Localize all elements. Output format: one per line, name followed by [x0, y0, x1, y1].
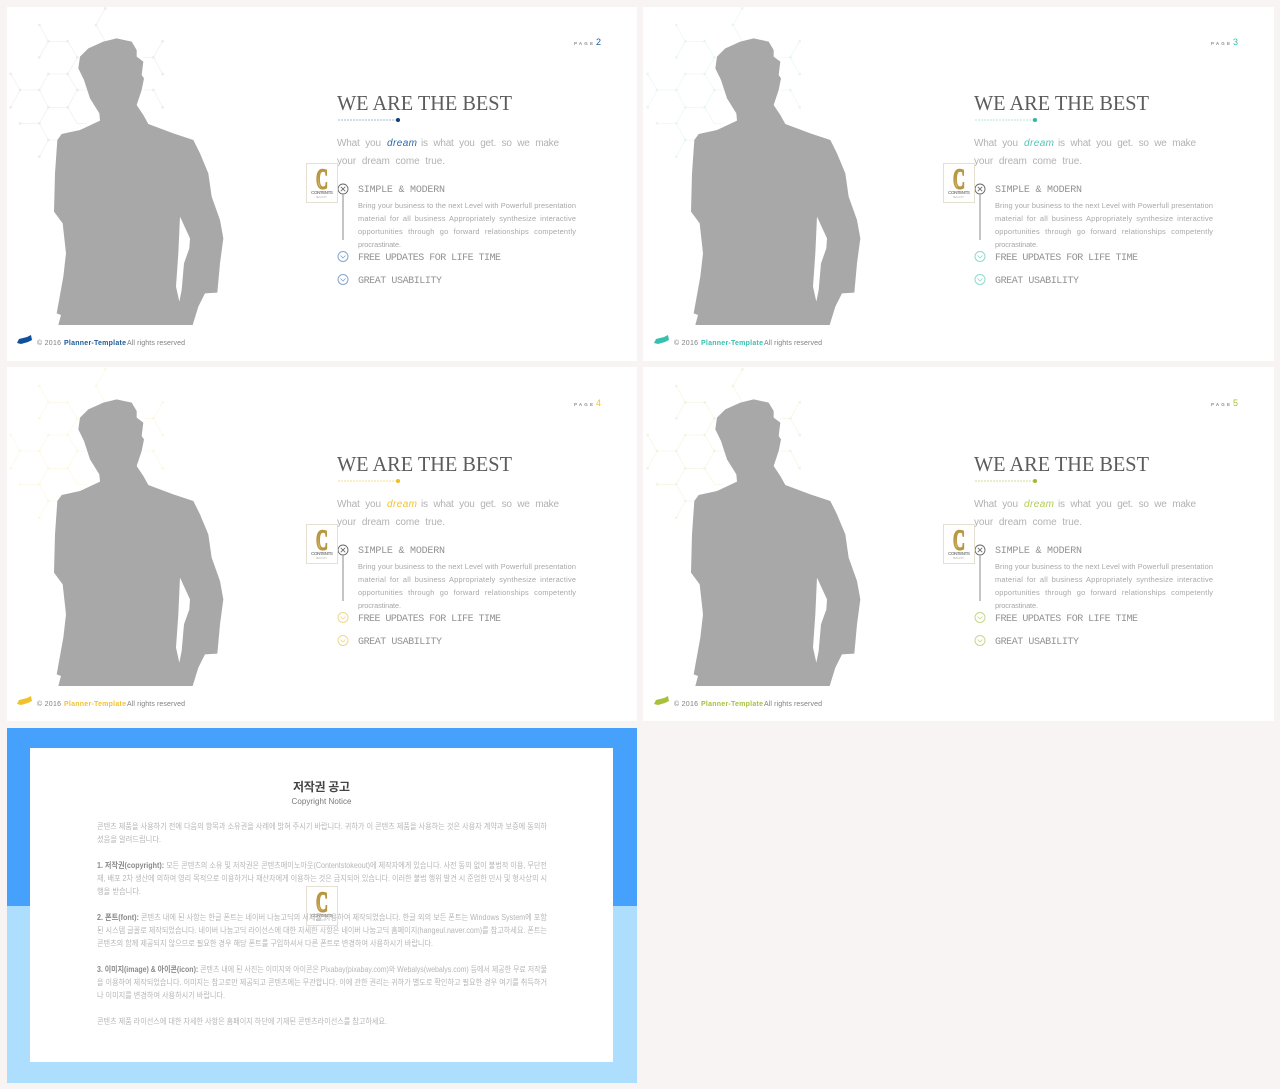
section 1: copyright: 1. 저작권(copyright): 모든 콘텐츠의 소유 및 저작권은 콘텐츠메이노아웃(Contentstokeout)에 제작자에게 있습니다. 사전 동의 없이 불법적 이용, 무단전 — [97, 860, 547, 870]
footer text: Planner-Template — [701, 701, 763, 708]
subtitle: is what you get. so we make — [421, 499, 559, 510]
heading underline — [975, 118, 1037, 122]
page number: PAGE — [574, 402, 593, 407]
notice title: 저작권 공고 — [293, 779, 350, 794]
page number: PAGE — [1211, 402, 1230, 407]
section 2: font: 콘텐츠의 함께 제공되지 않으므로 필요한 경우 해당 폰트를 구입하셔서 다른 폰트로 변경하여 사용하시기 바랍니다. — [97, 938, 433, 948]
heading underline — [975, 479, 1037, 483]
feature: simple and modern: material for all business Appropriately synthesize interactive — [995, 214, 1213, 223]
feature: simple and modern — [975, 545, 1213, 610]
footer icon — [17, 696, 32, 705]
feature: great usability: GREAT USABILITY — [358, 637, 442, 648]
logo: C — [316, 164, 328, 196]
feature: simple and modern: material for all business Appropriately synthesize interactive — [358, 575, 576, 584]
page number: 3 — [1233, 37, 1238, 47]
intro paragraph: 셨음을 알려드립니다. — [97, 834, 161, 844]
feature: simple and modern: procrastinate. — [358, 240, 401, 249]
page number: 4 — [596, 398, 601, 408]
heading: WE ARE THE BEST — [974, 91, 1149, 115]
page number: 2 — [596, 37, 601, 47]
feature: simple and modern: opportunities through go forward relationships competently — [995, 588, 1213, 597]
section 1: copyright: 행을 받습니다. — [97, 886, 141, 896]
slide 2: teal — [643, 7, 1274, 361]
subtitle: What you — [337, 499, 381, 510]
hexagon pattern — [646, 368, 801, 519]
page number — [574, 398, 601, 408]
page number: PAGE — [1211, 41, 1230, 46]
section 1: copyright: 재, 배포 2차 생산에 의하여 영리 목적으로 이용하거나 재산자에게 이용하는 것은 금지되어 있습니다. 이러한 불법 행위 발견 시 준엄한 민사 및 형사상의 시 — [97, 873, 547, 883]
section 2: font: 된 시스템 글꼴로 제작되었습니다. 네이버 나눔고딕 라이선스에 대한 자세한 사항은 네이버 나눔고딕 홈페이지(hangeul.naver.com)를 참고하세요. 폰트는 — [97, 925, 547, 935]
man silhouette — [54, 399, 223, 686]
footer text — [37, 339, 185, 347]
footer text: All rights reserved — [127, 340, 185, 347]
section 2: font — [97, 912, 548, 948]
logo — [944, 164, 974, 202]
slide 3: yellow — [7, 367, 637, 721]
feature: simple and modern — [975, 184, 1213, 249]
logo: CONTENTS — [948, 190, 971, 196]
footer icon — [17, 335, 32, 344]
heading: WE ARE THE BEST — [337, 452, 512, 476]
hexagon pattern — [9, 368, 164, 519]
slide 4: green — [643, 367, 1274, 721]
footer text: © 2016 — [37, 339, 61, 347]
subtitle: is what you get. so we make — [421, 138, 559, 149]
footer text: Planner-Template — [64, 340, 126, 347]
feature: simple and modern: SIMPLE & MODERN — [358, 185, 445, 196]
feature: simple and modern: Bring your business to the next Level with Powerfull presentation — [995, 201, 1213, 210]
subtitle: dream — [1024, 138, 1054, 149]
logo watermark — [306, 886, 338, 926]
feature: great usability: GREAT USABILITY — [358, 276, 442, 287]
footer text: Planner-Template — [64, 701, 126, 708]
section 3: image and icon — [97, 964, 547, 1000]
light blue background bottom — [7, 906, 637, 1083]
feature: simple and modern: procrastinate. — [358, 601, 401, 610]
page number: 5 — [1233, 398, 1238, 408]
page number — [1211, 37, 1238, 47]
man silhouette — [691, 38, 860, 325]
subtitle: is what you get. so we make — [1058, 138, 1196, 149]
subtitle — [337, 138, 559, 167]
footer icon — [654, 696, 669, 705]
subtitle: your dream come true. — [337, 517, 445, 528]
feature: simple and modern: procrastinate. — [995, 601, 1038, 610]
heading: WE ARE THE BEST — [974, 452, 1149, 476]
logo: REAL COPY — [953, 557, 964, 560]
feature: simple and modern: opportunities through go forward relationships competently — [358, 227, 576, 236]
logo: C — [953, 524, 965, 556]
footer text: All rights reserved — [127, 701, 185, 708]
section 3: image and icon: 나 이미지를 변경하여 사용하시기 바랍니다. — [97, 990, 225, 1000]
subtitle: dream — [387, 138, 417, 149]
subtitle: is what you get. so we make — [1058, 499, 1196, 510]
footer icon — [654, 335, 669, 344]
man silhouette — [54, 38, 223, 325]
footer text: © 2016 — [674, 700, 698, 708]
page number — [1211, 398, 1238, 408]
closing line: 콘텐츠 제품 라이선스에 대한 자세한 사항은 홈페이지 하단에 기재된 콘텐츠라이선스를 참고하세요. — [97, 1016, 387, 1026]
feature: simple and modern: SIMPLE & MODERN — [995, 185, 1082, 196]
heading underline — [338, 479, 400, 483]
feature: simple and modern: Bring your business to the next Level with Powerfull presentation — [358, 201, 576, 210]
slide 5: copyright notice — [7, 728, 637, 1083]
logo: CONTENTS — [311, 190, 334, 196]
subtitle: dream — [387, 499, 417, 510]
notice subtitle: Copyright Notice — [292, 797, 352, 806]
feature: simple and modern: Bring your business to the next Level with Powerfull presentation — [358, 562, 576, 571]
feature: simple and modern: material for all business Appropriately synthesize interactive — [995, 575, 1213, 584]
feature: simple and modern: SIMPLE & MODERN — [358, 546, 445, 557]
section 3: image and icon: 을 이용하여 제작되었습니다. 이미지는 참고로만 제공되고 콘텐츠에는 무관합니다. 이에 관한 권리는 귀하가 별도로 확인하고 필요한 경우 여기를 취득하거 — [97, 977, 547, 987]
feature: free updates: FREE UPDATES FOR LIFE TIME — [358, 253, 501, 264]
feature: simple and modern: opportunities through go forward relationships competently — [358, 588, 576, 597]
intro paragraph — [97, 821, 548, 844]
logo watermark: C — [316, 886, 328, 918]
page number: PAGE — [574, 41, 593, 46]
subtitle — [337, 499, 559, 528]
feature: simple and modern: Bring your business to the next Level with Powerfull presentation — [995, 562, 1213, 571]
subtitle: dream — [1024, 499, 1054, 510]
feature: simple and modern: material for all business Appropriately synthesize interactive — [358, 214, 576, 223]
footer text: All rights reserved — [764, 340, 822, 347]
footer text — [37, 700, 185, 708]
heading underline — [338, 118, 400, 122]
section 3: image and icon: 3. 이미지(image) & 아이콘(icon): 콘텐츠 내에 된 사진는 이미지와 아이콘은 Pixabay(pixabay.com)와 Webalys(webalys.com) 등에서 제공한 무료 저작물 — [97, 964, 547, 974]
feature: free updates: FREE UPDATES FOR LIFE TIME — [358, 614, 501, 625]
feature: free updates: FREE UPDATES FOR LIFE TIME — [995, 614, 1138, 625]
subtitle: What you — [974, 138, 1018, 149]
feature: free updates: FREE UPDATES FOR LIFE TIME — [995, 253, 1138, 264]
hexagon pattern — [9, 7, 164, 158]
logo: C — [316, 524, 328, 556]
logo watermark: CONTENTS — [311, 913, 334, 919]
subtitle: What you — [974, 499, 1018, 510]
blue background top — [7, 728, 637, 906]
man silhouette — [691, 399, 860, 686]
logo: REAL COPY — [316, 557, 327, 560]
intro paragraph: 콘텐츠 제품을 사용하기 전에 다음의 항목과 소유권을 사례에 밝혀 주시기 바랍니다. 귀하가 이 콘텐츠 제품을 사용하는 것은 사용자 계약과 보증에 동의하 — [97, 821, 548, 831]
logo — [306, 164, 338, 202]
subtitle: your dream come true. — [974, 517, 1082, 528]
footer text: © 2016 — [37, 700, 61, 708]
logo — [306, 524, 338, 564]
footer text — [674, 339, 822, 347]
heading: WE ARE THE BEST — [337, 91, 512, 115]
subtitle — [974, 138, 1196, 167]
feature: simple and modern — [338, 184, 576, 249]
footer text: All rights reserved — [764, 701, 822, 708]
slide 1: blue — [7, 7, 637, 361]
logo watermark: REAL COPY — [316, 919, 327, 922]
hexagon pattern — [646, 7, 801, 158]
white panel — [30, 748, 613, 1062]
feature: simple and modern: SIMPLE & MODERN — [995, 546, 1082, 557]
feature: simple and modern: opportunities through go forward relationships competently — [995, 227, 1213, 236]
subtitle: your dream come true. — [974, 156, 1082, 167]
logo: C — [953, 164, 965, 196]
logo: REAL COPY — [316, 196, 327, 199]
logo: CONTENTS — [311, 551, 334, 557]
feature: great usability: GREAT USABILITY — [995, 276, 1079, 287]
subtitle: What you — [337, 138, 381, 149]
feature: simple and modern — [338, 545, 576, 610]
subtitle: your dream come true. — [337, 156, 445, 167]
footer text: Planner-Template — [701, 340, 763, 347]
feature: simple and modern: procrastinate. — [995, 240, 1038, 249]
logo: REAL COPY — [953, 196, 964, 199]
page number — [574, 37, 601, 47]
logo: CONTENTS — [948, 551, 971, 557]
section 2: font: 2. 폰트(font): 콘텐츠 내에 된 사항는 한글 폰트는 네이버 나눔고딕의 서체를 사용하여 제작되었습니다. 한글 외의 보든 폰트는 Windows System에 포함 — [97, 912, 548, 922]
subtitle — [974, 499, 1196, 528]
section 1: copyright — [97, 860, 547, 896]
footer text: © 2016 — [674, 339, 698, 347]
logo — [944, 524, 974, 564]
feature: great usability: GREAT USABILITY — [995, 637, 1079, 648]
footer text — [674, 700, 822, 708]
